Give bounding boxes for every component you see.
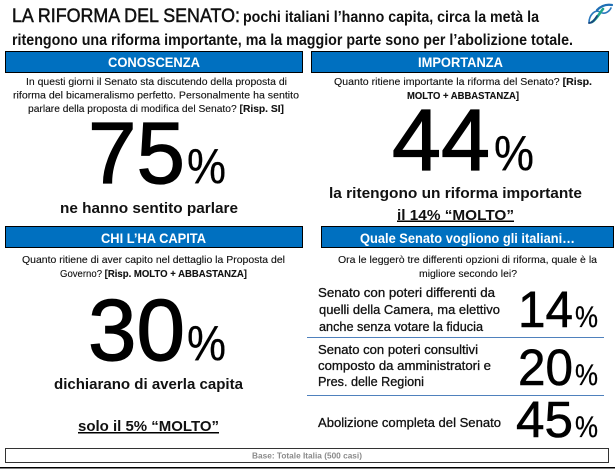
heading: importanza — [312, 52, 608, 72]
option row: 20%: 20 — [518, 339, 573, 396]
option row: 20%: Senato con poteri consultivi — [318, 342, 478, 357]
caption: dichiarano di averla capita — [54, 376, 244, 393]
option row: 20%: Pres. delle Regioni — [318, 374, 424, 389]
question text — [334, 76, 592, 102]
option row: 14%: % — [575, 301, 598, 334]
big number: 30%: % — [187, 317, 226, 371]
title — [12, 6, 573, 49]
sub-caption: solo il 5% “MOLTO” — [78, 418, 219, 435]
big number: 44%: 44 — [392, 92, 490, 189]
option row: 14%: Senato con poteri differenti da — [318, 285, 496, 300]
question text: Quanto ritiene di aver capito nel dettaglio la Proposta del — [22, 254, 285, 266]
sub-caption: il 14% “MOLTO” — [397, 207, 514, 224]
heading: chi l'ha capita — [6, 226, 302, 248]
question text — [338, 254, 597, 280]
panel: chi l'ha capita — [6, 226, 302, 435]
question text: Ora le leggerò tre differenti opzioni di riforma, quale è la — [338, 254, 597, 266]
big number: 44%: % — [494, 127, 534, 181]
question text — [13, 76, 299, 115]
title: LA RIFORMA DEL SENATO: — [12, 6, 240, 27]
base note: Base: Totale Italia (500 casi) — [252, 450, 362, 460]
heading: conoscenza: CONOSCENZA — [108, 54, 200, 70]
big number: 75%: 75 — [88, 105, 185, 202]
option row: 45%: Abolizione completa del Senato — [318, 415, 501, 430]
big number: 30%: 30 — [88, 282, 185, 379]
panel: conoscenza — [6, 52, 302, 217]
title: pochi italiani l’hanno capita, circa la metà la — [243, 9, 539, 26]
question text: MOLTO + ABBASTANZA] — [407, 90, 519, 102]
big number: 44% — [392, 92, 534, 189]
option row: 45% — [318, 391, 598, 448]
option row: 20%: composto da amministratori e — [318, 358, 491, 373]
option row: 45%: 45 — [516, 391, 573, 448]
option row: 20% — [318, 339, 598, 396]
question text: parlare della proposta di modifica del Senato? [Risp. SI] — [28, 103, 284, 115]
heading: quale senato: Quale Senato vogliono gli italiani… — [360, 230, 575, 246]
question text: migliore secondo lei? — [419, 268, 517, 280]
option row: 14%: quelli della Camera, ma elettivo — [319, 302, 500, 317]
icon: logo — [589, 5, 612, 23]
caption: ne hanno sentito parlare — [60, 200, 238, 217]
heading: quale senato — [322, 226, 614, 248]
heading: conoscenza — [6, 52, 302, 72]
heading: importanza: IMPORTANZA — [418, 54, 503, 70]
caption: la ritengono un riforma importante — [329, 185, 582, 202]
question text: riforma del bicameralismo perfetto. Personalmente ha sentito — [13, 90, 299, 102]
option row: 14%: anche senza votare la fiducia — [319, 319, 484, 334]
question text: Governo? [Risp. MOLTO + ABBASTANZA] — [60, 268, 247, 280]
big number: 75%: % — [187, 140, 226, 194]
option row: 45%: % — [575, 411, 598, 444]
option row: 14% — [318, 281, 598, 338]
option row: 14%: 14 — [518, 281, 573, 338]
question text: Quanto ritiene importante la riforma del Senato? [Risp. — [334, 76, 592, 88]
title: ritengono una riforma importante, ma la maggior parte sono per l’abolizione totale. — [12, 32, 573, 49]
question text — [22, 254, 285, 280]
base note — [6, 448, 608, 462]
panel: importanza — [312, 52, 608, 224]
question text: In questi giorni il Senato sta discutendo della proposta di — [26, 76, 287, 88]
heading: chi l'ha capita: CHI L’HA CAPITA — [101, 230, 206, 246]
panel: quale senato — [307, 226, 614, 448]
option row: 20%: % — [575, 359, 598, 392]
